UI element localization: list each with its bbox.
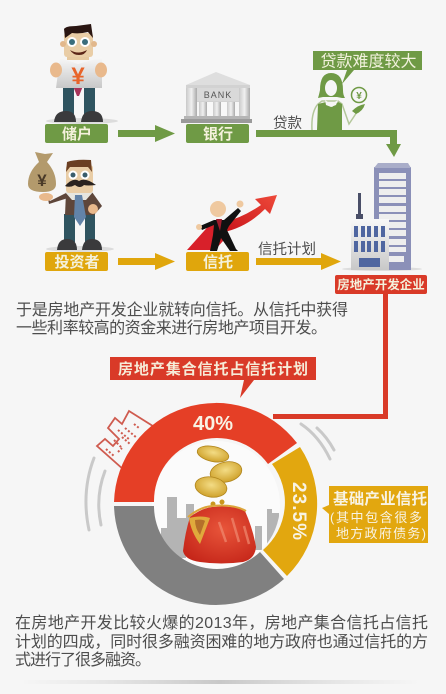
chart: donut bbox=[114, 403, 317, 605]
segment: yellow 23.5% bbox=[263, 447, 317, 576]
text: intro paragraph: 一些利率较高的资金来进行房地产项目开发。 bbox=[16, 319, 327, 337]
arrow: saver to bank bbox=[118, 125, 175, 142]
text: closing paragraph: 在房地产开发比较火爆的2013年，房地产集合信托占信托 bbox=[15, 613, 428, 632]
text: trust plan: 信托计划 bbox=[258, 241, 316, 258]
icon: red purse bbox=[183, 500, 256, 564]
arrow: loan line from bank to developer bbox=[256, 130, 401, 157]
bottom shadow line bbox=[20, 680, 420, 684]
icon: bank clerk woman bbox=[312, 73, 366, 130]
icon: falling gold coins bbox=[194, 443, 244, 500]
connector: developer to donut bbox=[273, 294, 388, 419]
callout: infrastructure trust: 基础产业信托 bbox=[333, 490, 427, 508]
text: closing paragraph: 计划的四成，同时很多融资困难的地方政府也通过信托的方 bbox=[15, 633, 428, 651]
callout: loan difficulty: 贷款难度较大 bbox=[320, 52, 417, 70]
value: 23.5%: 23.5% bbox=[288, 482, 309, 540]
icon: saver man holding yen paper bbox=[46, 24, 118, 124]
text: intro paragraph bbox=[16, 301, 348, 337]
icon: businessman with rising red arrow bbox=[187, 195, 277, 251]
icon: bank clerk woman: ¥ bbox=[356, 91, 362, 102]
center hole bbox=[152, 441, 280, 569]
arrow: investor to trust bbox=[118, 253, 175, 270]
text: intro paragraph: 于是房地产开发企业就转向信托。从信托中获得 bbox=[16, 301, 348, 319]
icon: investor with money bag: ¥ bbox=[37, 171, 47, 190]
label: real estate developer: 房地产开发企业 bbox=[337, 277, 425, 292]
callout: infrastructure trust: (其中包含很多 bbox=[330, 510, 422, 525]
text: closing paragraph bbox=[15, 613, 428, 669]
icon: investor with money bag bbox=[28, 152, 114, 252]
icon: bank building: BANK bbox=[204, 90, 232, 100]
segment: red 40% bbox=[114, 403, 297, 502]
value: 40%: 40% bbox=[193, 413, 233, 435]
label: investor bbox=[45, 252, 108, 271]
callout: real estate share heading: 房地产集合信托占信托计划 bbox=[118, 360, 308, 378]
callout: loan difficulty bbox=[313, 51, 422, 84]
segment: gray remainder bbox=[114, 506, 284, 605]
label: trust: 信托 bbox=[203, 253, 233, 271]
label: trust bbox=[186, 252, 249, 271]
callout: infrastructure trust: 地方政府债务) bbox=[336, 526, 426, 541]
label: saver bbox=[45, 124, 108, 143]
label: investor: 投资者 bbox=[54, 253, 100, 271]
label: saver: 储户 bbox=[62, 125, 92, 143]
callout: real estate share heading bbox=[110, 357, 316, 398]
text: loan: 贷款 bbox=[273, 115, 302, 132]
icon: red outlined city bbox=[97, 411, 156, 470]
icon: bank building bbox=[181, 72, 252, 123]
icon: gray city skyline bbox=[161, 497, 279, 558]
decorative motion arcs bbox=[86, 424, 334, 530]
icon: saver man holding yen paper: ¥ bbox=[71, 63, 85, 90]
arrow: trust to developer bbox=[256, 253, 341, 270]
label: bank bbox=[186, 124, 249, 143]
text: closing paragraph: 式进行了很多融资。 bbox=[15, 651, 151, 669]
icon: developer office buildings bbox=[342, 163, 422, 271]
label: bank: 银行 bbox=[203, 125, 233, 143]
callout: infrastructure trust bbox=[322, 486, 428, 543]
